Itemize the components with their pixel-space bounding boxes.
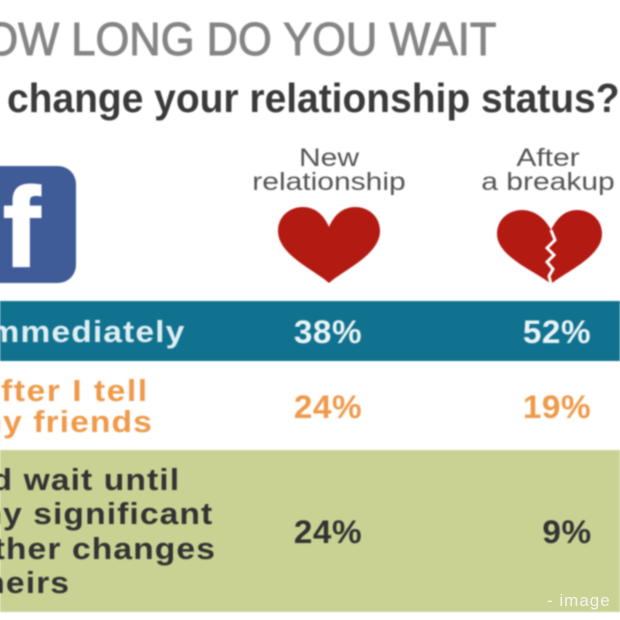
after breakup value: 52% [523,314,591,350]
column heading: after a breakup: a breakup [481,168,615,196]
subtitle: change your relationship status? [7,75,619,121]
row label [0,462,216,600]
icon: facebook logo [0,166,76,283]
letter f: f [3,165,40,290]
row: after I tell my friends [0,361,620,450]
icon: heart [277,206,381,284]
after breakup value: 19% [523,389,591,425]
column heading: after a breakup: After [516,144,580,172]
column heading: new relationship: New [299,144,359,172]
row label [0,373,153,440]
new relationship value: 38% [294,314,362,350]
new relationship value: 24% [294,514,362,550]
new relationship value: 24% [294,389,362,425]
after breakup value: 9% [542,514,592,550]
icon: broken heart [496,209,603,284]
column heading: after a breakup [481,144,615,196]
image caption: - image [547,591,611,610]
column heading: new relationship [252,144,406,196]
column heading: new relationship: relationship [252,168,406,196]
row: immediately [0,301,620,361]
row: wait until significant other [0,450,620,612]
